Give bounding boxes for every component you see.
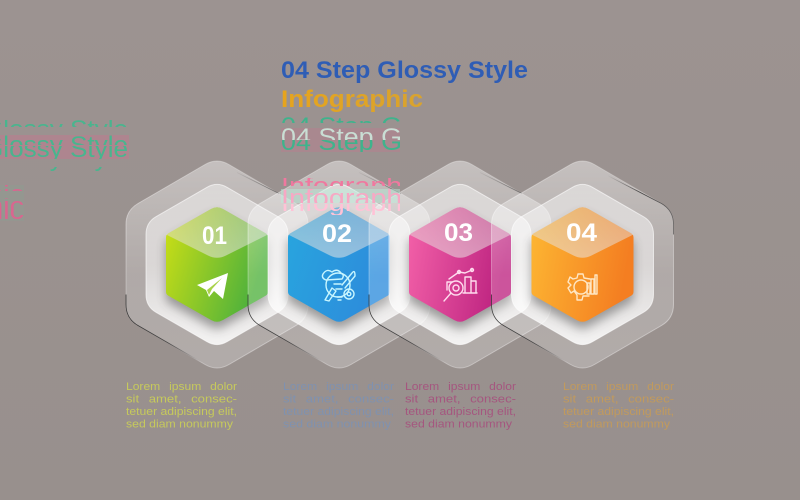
step 2 text: sed diam nonummy <box>283 418 392 430</box>
title line 2: Infographic <box>281 86 423 113</box>
icon: magnifier over chart <box>444 268 477 301</box>
step 3 text: sit amet, consec- <box>405 394 516 406</box>
step 1 text <box>126 381 237 430</box>
step 4 text: sit amet, consec- <box>563 394 674 406</box>
outer glass hexagon <box>492 161 674 368</box>
cube top face <box>166 207 268 258</box>
glitch ghost text center: Infographic <box>281 190 423 217</box>
step 1 text: Lorem ipsum dolor <box>126 381 237 393</box>
number 03: 03 <box>444 219 473 247</box>
step 2 hexagon <box>248 161 430 368</box>
glitch ghost text center: Infographic <box>281 173 423 200</box>
cube top face <box>409 207 511 258</box>
outer glass hexagon <box>126 161 308 368</box>
number 01: 01 <box>202 222 227 250</box>
green cube <box>166 207 268 322</box>
step 4 text: tetuer adipiscing elit, <box>563 406 674 418</box>
glitch ghost text center: 04 Step G <box>281 113 402 140</box>
middle glass hexagon <box>146 184 288 345</box>
glitch ghost text left <box>0 116 129 225</box>
step 3 text: tetuer adipiscing elit, <box>405 406 516 418</box>
cube top face <box>532 207 634 258</box>
icon: paper plane <box>197 273 228 299</box>
step 4 text: Lorem ipsum dolor <box>563 381 674 393</box>
step 1 text: sit amet, consec- <box>126 394 237 406</box>
middle glass hexagon <box>268 184 410 345</box>
step 2 text: sit amet, consec- <box>283 394 394 406</box>
number 02: 02 <box>322 220 352 248</box>
step 3 hexagon <box>369 161 551 368</box>
title line 1: 04 Step Glossy Style <box>281 57 528 84</box>
step 1 text: sed diam nonummy <box>126 418 234 430</box>
step 4 text: sed diam nonummy <box>563 418 671 430</box>
glitch ghost text center: Infographic <box>281 185 423 212</box>
middle glass hexagon <box>512 184 654 345</box>
step 2 text <box>283 381 394 430</box>
pink cube <box>409 207 511 322</box>
step 1 hexagon <box>126 161 308 368</box>
glitch ghost text center: 04 Step G <box>281 129 402 156</box>
cube top face <box>288 207 390 258</box>
title <box>281 57 528 113</box>
glitch ghost text center <box>281 117 400 215</box>
number 04: 04 <box>566 219 597 247</box>
step 3 text <box>405 381 516 430</box>
outer glass hexagon <box>248 161 430 368</box>
step 3 text: Lorem ipsum dolor <box>405 381 516 393</box>
step 1 text: tetuer adipiscing elit, <box>126 406 237 418</box>
step 4 text <box>563 381 674 430</box>
outer glass hexagon <box>369 161 551 368</box>
icon: globe with pencil and gear <box>322 270 355 301</box>
orange cube <box>532 207 634 322</box>
step 2 text: Lorem ipsum dolor <box>283 381 394 393</box>
glitch ghost text center: 04 Step G <box>281 124 402 151</box>
step 3 text: sed diam nonummy <box>405 418 513 430</box>
middle glass hexagon <box>389 184 531 345</box>
step 4 hexagon <box>492 161 674 368</box>
icon: gear with bar chart <box>568 274 597 300</box>
step 2 text: tetuer adipiscing elit, <box>283 406 394 418</box>
blue cube <box>288 207 390 322</box>
